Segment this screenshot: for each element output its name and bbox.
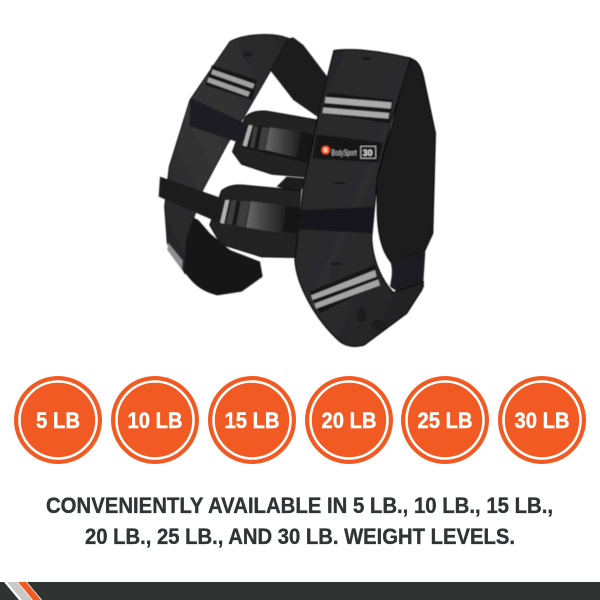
badge: 20 LB — [305, 376, 393, 464]
lower buckle — [159, 177, 300, 233]
badge: 20 LB: 20 LB — [322, 408, 376, 433]
front strap waist band — [297, 207, 375, 233]
front strap top reflective stripes — [321, 93, 393, 123]
badge: 25 LB: 25 LB — [418, 408, 472, 433]
badge: 10 LB: 10 LB — [128, 408, 182, 433]
left strap reflective stripes — [167, 65, 257, 270]
badge: 10 LB — [111, 376, 199, 464]
weight badges — [14, 376, 586, 464]
caption text: CONVENIENTLY AVAILABLE IN 5 LB., 10 LB., 15 LB., — [46, 493, 553, 518]
strap pads dimples — [243, 52, 385, 330]
upper buckle pad — [233, 111, 317, 177]
lower buckle pad — [210, 185, 301, 257]
footer bar with stripes — [0, 582, 600, 600]
gap fill between the two buckle pads — [277, 177, 307, 193]
brand label: BodySport — [331, 148, 357, 157]
product: weighted vest — [159, 35, 435, 346]
front strap bottom reflective stripes — [309, 265, 380, 313]
badge: 25 LB — [401, 376, 489, 464]
front shoulder strap — [295, 50, 423, 346]
badge: 15 LB: 15 LB — [224, 408, 280, 433]
brand label: 30 — [363, 148, 373, 158]
rear tab — [390, 251, 425, 302]
back strap — [270, 37, 327, 117]
left shoulder strap — [165, 35, 288, 273]
brand label — [313, 134, 383, 163]
badge: 5 LB: 5 LB — [36, 408, 80, 433]
badge: 30 LB — [498, 376, 586, 464]
lower left inner pad — [178, 215, 263, 295]
caption text: 20 LB., 25 LB., AND 30 LB. WEIGHT LEVELS. — [85, 524, 515, 549]
brand label: B — [324, 148, 328, 154]
upper buckle — [189, 98, 313, 164]
caption text — [46, 493, 553, 549]
badge: 30 LB: 30 LB — [514, 408, 570, 433]
badge: 15 LB — [208, 376, 296, 464]
badge: 5 LB — [14, 376, 102, 464]
right rear pad — [377, 58, 435, 262]
